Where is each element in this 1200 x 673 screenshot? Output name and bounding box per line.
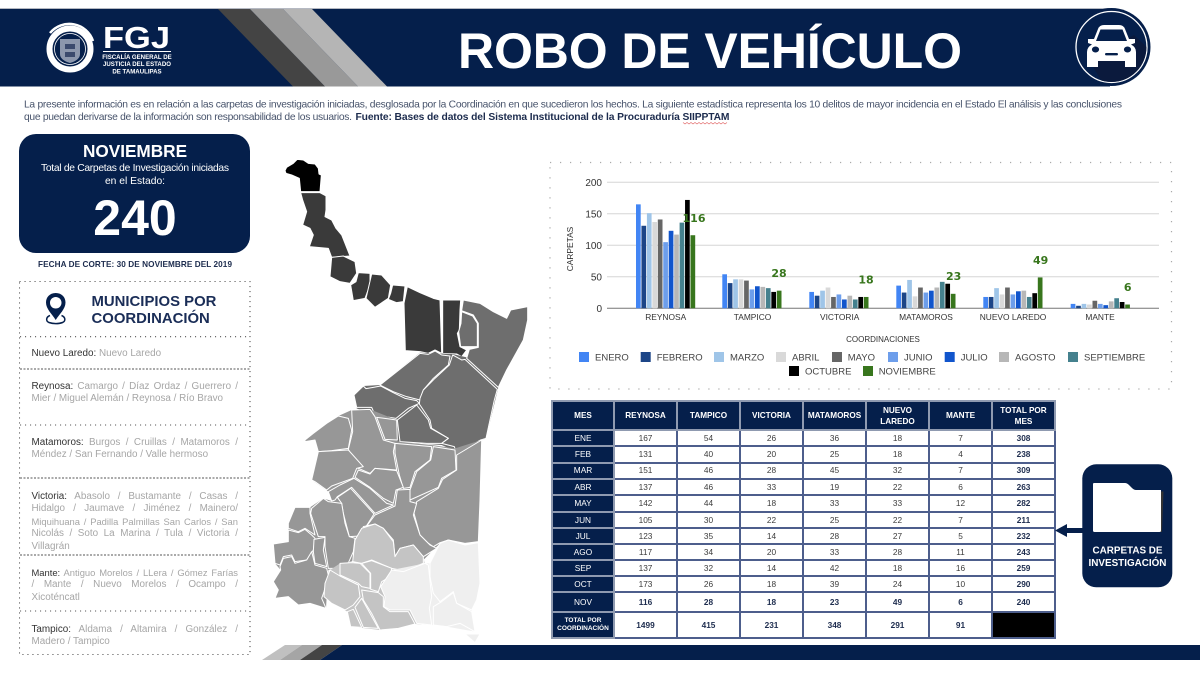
table: 5	[958, 530, 963, 540]
table: MANTE	[946, 411, 975, 420]
table	[551, 400, 1056, 639]
table: 33	[767, 482, 776, 492]
table: 25	[830, 514, 839, 524]
legend: SEPTIEMBRE	[1084, 352, 1145, 364]
table: 117	[639, 546, 652, 556]
category labels: MANTE	[1085, 312, 1115, 322]
bars: Tampico	[722, 274, 782, 308]
table: 309	[1017, 465, 1030, 475]
table: 26	[767, 432, 776, 442]
list: Nuevo Laredo: Nuevo Laredo: Nuevo Laredo	[32, 348, 161, 358]
table: 240	[1017, 596, 1030, 606]
table: 45	[830, 465, 839, 475]
table: 34	[704, 546, 713, 556]
table: 123	[639, 530, 652, 540]
icon: folder	[1093, 483, 1164, 532]
panel: bar chart	[549, 162, 1172, 390]
value labels: 23	[946, 270, 961, 283]
table: 22	[767, 514, 776, 524]
table: VICTORIA	[752, 411, 791, 420]
value labels	[683, 212, 1132, 294]
table: 238	[1017, 449, 1030, 459]
table: 291	[891, 620, 904, 630]
table: 1499	[636, 620, 655, 630]
table: 167	[639, 432, 652, 442]
bars: Mante	[1071, 298, 1130, 308]
list: Reynosa	[32, 381, 238, 404]
category labels: REYNOSA	[645, 312, 687, 322]
value labels: 49	[1033, 254, 1048, 267]
table: 20	[767, 546, 776, 556]
logo: FGJ: DE TAMAULIPAS	[112, 68, 162, 76]
panel: noviembre total	[19, 134, 250, 253]
list: Matamoros	[32, 437, 238, 460]
list: Tampico	[32, 624, 238, 647]
table: NOV	[574, 596, 592, 606]
bars: Nuevo Laredo	[983, 277, 1042, 308]
table: 7	[958, 514, 963, 524]
table: ABR	[574, 482, 592, 492]
list: Victoria: Hidalgo / Jaumave / Jiménez / Mainero/	[32, 503, 238, 514]
table: 18	[767, 578, 776, 588]
table: 7	[958, 432, 963, 442]
arrow	[1055, 524, 1083, 537]
table: 46	[704, 465, 713, 475]
table: 7	[958, 465, 963, 475]
table: 28	[704, 596, 713, 606]
table: 12	[956, 498, 965, 508]
value labels: 18	[858, 274, 874, 286]
list: Mante: Mante: Antiguo Morelos / LLera / Gómez Farías	[32, 567, 238, 578]
table: 6	[958, 596, 963, 606]
table: TOTAL POR	[1000, 406, 1047, 414]
table: AGO	[574, 546, 592, 556]
icon: car badge	[1075, 8, 1150, 86]
table: 36	[830, 432, 839, 442]
legend: JUNIO	[904, 352, 932, 364]
list: Matamoros: Matamoros: Burgos / Cruillas / Matamoros /	[32, 437, 238, 448]
table: 24	[893, 578, 902, 588]
value labels: 116	[683, 212, 706, 225]
table: COORDINACIÓN	[557, 625, 609, 632]
table: 231	[765, 620, 778, 630]
legend: MAYO	[848, 352, 875, 364]
table: 263	[1017, 482, 1030, 492]
table: 282	[1017, 498, 1030, 508]
header banner	[0, 8, 1150, 86]
list: Tampico: Tampico: Aldama / Altamira / González /	[32, 624, 238, 634]
legend: MARZO	[730, 352, 764, 364]
bars: Matamoros	[896, 280, 956, 308]
panel: noviembre total: NOVIEMBRE	[83, 141, 187, 161]
legend: ENERO	[595, 352, 629, 364]
table: 290	[1017, 578, 1030, 588]
callout: carpetas de investigación	[1055, 464, 1172, 588]
map of Tamaulipas	[274, 160, 528, 642]
list: Reynosa: Mier / Miguel Alemán / Reynosa / Río Bravo	[32, 393, 223, 404]
table: MAR	[574, 465, 592, 475]
table: 33	[893, 498, 902, 508]
logo: FGJ: FGJ	[103, 20, 170, 55]
logo: FGJ	[50, 20, 172, 76]
table: 16	[956, 562, 965, 572]
y axis labels: 100	[585, 241, 602, 252]
legend: AGOSTO	[1015, 352, 1055, 364]
intro text	[24, 100, 1122, 124]
table: 33	[830, 498, 839, 508]
category labels: VICTORIA	[820, 312, 860, 322]
table: 22	[893, 514, 902, 524]
table: 11	[956, 546, 965, 556]
legend: NOVIEMBRE	[879, 366, 936, 378]
table: 6	[958, 482, 963, 492]
table: 259	[1017, 562, 1030, 572]
table: 19	[830, 482, 839, 492]
table: 28	[893, 546, 902, 556]
list: Mante	[32, 567, 238, 603]
legend: FEBRERO	[657, 352, 703, 364]
table: TAMPICO	[690, 411, 727, 420]
y axis labels: 0	[596, 304, 602, 315]
bars: Reynosa	[636, 200, 695, 308]
panel: noviembre total: 240	[93, 190, 177, 246]
table: 142	[639, 498, 652, 508]
footer bar	[262, 645, 1200, 660]
category labels: NUEVO LAREDO	[980, 312, 1047, 322]
category labels	[645, 312, 1115, 322]
table: MES	[1015, 416, 1032, 426]
table: 211	[1017, 514, 1030, 524]
table: 10	[956, 578, 965, 588]
list: Mante: / Mante / Nuevo Morelos / Ocampo /	[32, 579, 238, 590]
table: 18	[893, 432, 902, 442]
table: 18	[893, 449, 902, 459]
heading: municipios	[92, 294, 216, 326]
table: 32	[893, 465, 902, 475]
cut-off date: FECHA DE CORTE: 30 DE NOVIEMBRE DEL 2019	[38, 260, 232, 269]
y axis labels	[585, 178, 602, 315]
category labels: MATAMOROS	[899, 312, 953, 322]
table: 46	[704, 482, 713, 492]
list: Matamoros: Méndez / San Fernando / Valle hermoso	[32, 449, 208, 460]
title: ROBO DE VEHÍCULO	[458, 23, 962, 79]
table: REYNOSA	[625, 411, 666, 420]
table: 4	[958, 449, 963, 459]
table: TOTAL POR	[565, 616, 601, 624]
table: MES	[574, 411, 592, 420]
table: 35	[704, 530, 713, 540]
list: Reynosa: Reynosa: Camargo / Díaz Ordaz / Guerrero /	[32, 381, 238, 392]
table: 39	[830, 578, 839, 588]
heading: municipios: COORDINACIÓN	[92, 310, 210, 326]
table: 91	[956, 620, 965, 630]
table: OCT	[574, 578, 592, 588]
value labels: 6	[1124, 281, 1132, 294]
table: 18	[767, 596, 776, 606]
table: 18	[767, 498, 776, 508]
table: 308	[1017, 432, 1030, 442]
table: 32	[704, 562, 713, 572]
panel: noviembre total: Total de Carpetas de Investigación iniciadas	[41, 163, 229, 174]
legend: OCTUBRE	[805, 366, 851, 378]
logo: FGJ: JUSTICIA DEL ESTADO	[103, 61, 171, 68]
table: 116	[639, 596, 652, 606]
table: 42	[830, 562, 839, 572]
table: 131	[639, 449, 652, 459]
table: NUEVO	[883, 406, 912, 414]
callout: carpetas de investigación: CARPETAS DE	[1092, 545, 1163, 556]
table: 20	[767, 449, 776, 459]
panel: noviembre total: en el Estado:	[105, 176, 165, 187]
list: Mante: Xicoténcatl	[32, 592, 80, 603]
list: Victoria: Villagrán	[32, 541, 70, 552]
table: 22	[893, 482, 902, 492]
value labels: 28	[771, 267, 787, 280]
x axis title: COORDINACIONES	[846, 335, 920, 344]
table: 137	[639, 562, 652, 572]
table: 415	[702, 620, 715, 630]
table: MAY	[574, 498, 592, 508]
table: 28	[767, 465, 776, 475]
y axis labels: 150	[585, 210, 602, 220]
table: 14	[767, 530, 776, 540]
icon: location pin	[46, 293, 66, 324]
y axis labels: 50	[591, 272, 602, 284]
table: 40	[704, 449, 713, 459]
table: FEB	[575, 449, 591, 459]
intro text: Fuente: Bases de datos del Sistema Institucional de la Procuraduría SIIPPTAM	[356, 112, 730, 123]
panel: municipios por coordinación	[19, 281, 251, 655]
y axis labels: 200	[585, 178, 602, 189]
y axis title: CARPETAS	[565, 226, 575, 271]
table: 151	[639, 465, 652, 475]
table: 232	[1017, 530, 1030, 540]
list: Victoria	[32, 491, 238, 552]
table: 27	[893, 530, 902, 540]
table: 33	[830, 546, 839, 556]
list: Tampico: Madero / Tampico	[32, 636, 110, 647]
table: 25	[830, 449, 839, 459]
legend: ABRIL	[792, 352, 819, 364]
legend: JULIO	[961, 352, 988, 364]
list: Victoria: Nicolás / Soto La Marina / Tula / Victoria /	[32, 528, 238, 539]
table: 173	[639, 578, 652, 588]
table: 18	[893, 562, 902, 572]
intro text: que puedan derivarse de la información son responsabilidad de los usuarios.	[24, 112, 352, 123]
table: 54	[704, 432, 713, 442]
logo: FGJ: FISCALÍA GENERAL DE	[102, 53, 172, 61]
table: 30	[704, 514, 713, 524]
heading: municipios: MUNICIPIOS POR	[92, 294, 216, 310]
list: Victoria: Miquihuana / Padilla Palmillas San Carlos / San	[32, 516, 238, 527]
callout: carpetas de investigación: INVESTIGACIÓN	[1089, 557, 1166, 569]
category labels: TAMPICO	[734, 312, 772, 322]
table: 105	[639, 514, 652, 524]
table: 348	[828, 620, 841, 630]
table: 243	[1017, 546, 1030, 556]
table: JUL	[576, 530, 590, 540]
table: 28	[830, 530, 839, 540]
table: 44	[704, 498, 713, 508]
table: LAREDO	[880, 416, 915, 426]
table: 26	[704, 578, 713, 588]
bars: Victoria	[809, 288, 868, 308]
table: 49	[893, 596, 902, 606]
table: ENE	[574, 432, 592, 442]
list: Victoria: Victoria: Abasolo / Bustamante / Casas /	[32, 491, 238, 502]
table: 14	[767, 562, 776, 572]
table: 23	[830, 596, 839, 606]
intro text: La presente información es en relación a las carpetas de investigación iniciadas, desglosada por la Coordinación en que sucedieron los hechos. La siguiente estadística representa los 10 delitos de mayor incidencia en el Estado El análisis y las conclusiones	[24, 100, 1122, 110]
table: SEP	[575, 562, 591, 572]
table: JUN	[575, 514, 591, 524]
table: MATAMOROS	[808, 411, 861, 420]
table: 137	[639, 482, 652, 492]
legend	[579, 352, 1145, 378]
